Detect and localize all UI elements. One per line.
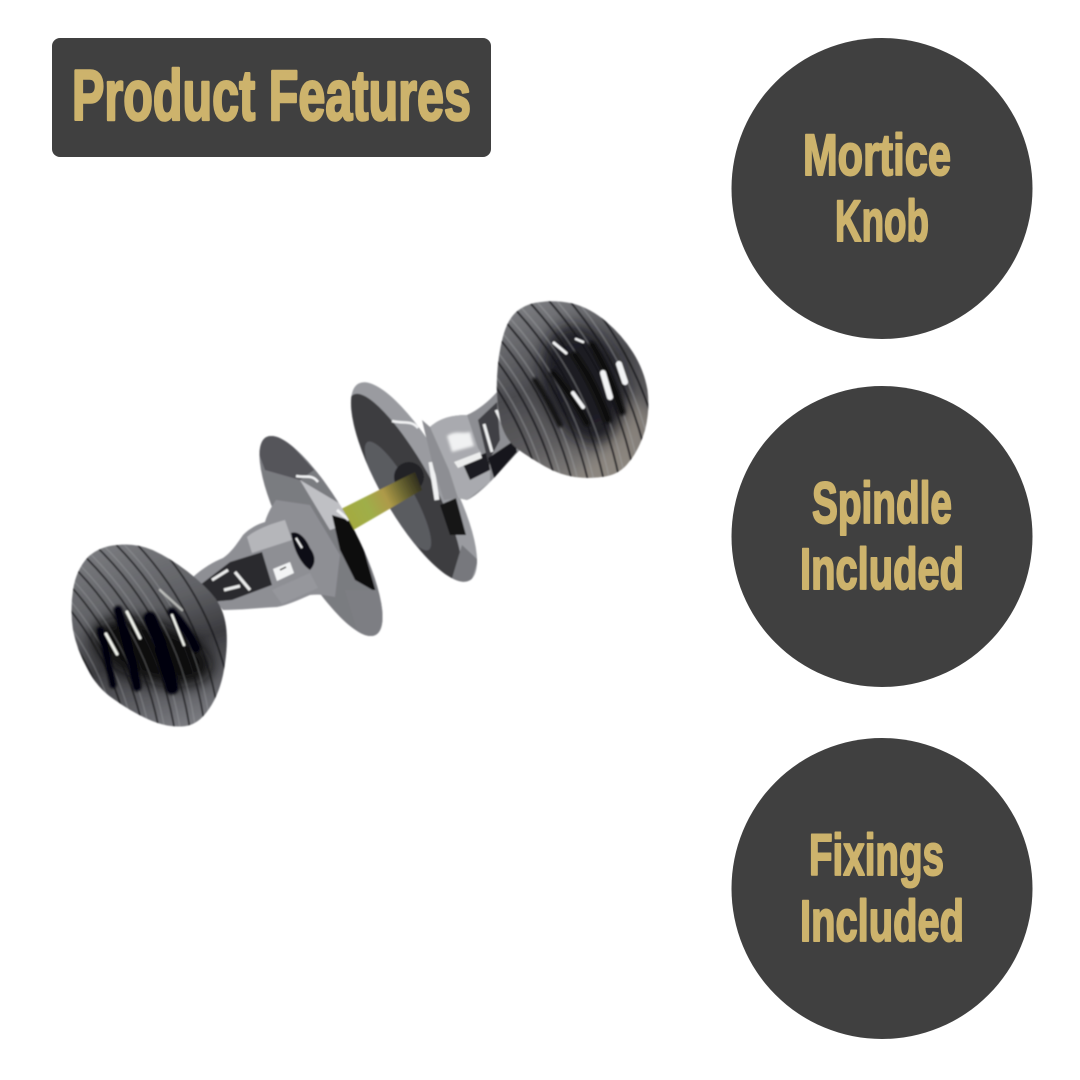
black streaks [100, 610, 196, 688]
title: Product Features: Product Features [72, 57, 471, 136]
feature badge: Fixings Included: Fixings [809, 823, 944, 888]
boss [430, 415, 490, 500]
left reeded head [70, 544, 228, 728]
feature badge: Fixings Included [732, 738, 1032, 1039]
feature badge: Spindle Included [732, 386, 1032, 687]
left neck [193, 500, 340, 610]
feature badge: Mortice Knob [732, 38, 1032, 339]
chrome highlights [554, 339, 625, 407]
spindle [333, 472, 422, 536]
feature badge: Spindle Included: Included [800, 537, 964, 602]
feature badge: Spindle Included: Spindle [812, 471, 952, 536]
right neck [422, 392, 520, 500]
groove lines [71, 544, 225, 727]
groove lines [496, 300, 650, 479]
product illustration: chrome reeded mortice door knob set [70, 300, 650, 728]
black streaks [535, 345, 622, 425]
feature badge: Fixings Included: Included [800, 889, 964, 954]
right reeded head [496, 300, 650, 479]
feature badge: Mortice Knob: Mortice [803, 123, 951, 188]
chrome highlights [106, 590, 184, 654]
right rose plate [350, 381, 478, 583]
feature badge: Mortice Knob: Knob [835, 189, 929, 254]
title: Product Features [52, 38, 491, 157]
left rose plate [258, 435, 384, 637]
